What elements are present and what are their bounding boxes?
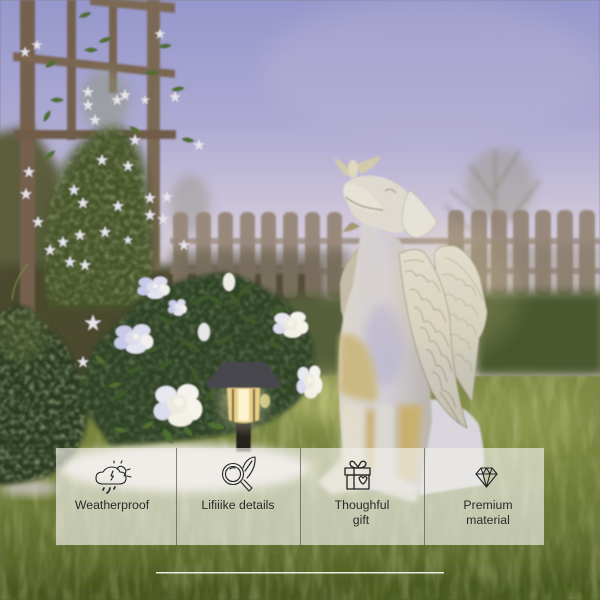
gap shadow behind fence <box>170 250 350 310</box>
divider lines <box>176 448 424 545</box>
climbing vine <box>20 10 205 310</box>
white gravel bed <box>0 444 310 495</box>
warm light overlay <box>380 225 520 355</box>
gardenia flowers <box>114 324 153 354</box>
lawn <box>0 376 600 600</box>
label: Weatherproof <box>75 498 150 512</box>
label: Thoughful <box>335 498 389 512</box>
solar garden lamp <box>207 362 280 452</box>
wooden fence <box>170 210 600 298</box>
feature: premium material: material <box>466 513 510 527</box>
feature: thoughtful gift <box>335 461 389 527</box>
front wing <box>399 249 467 428</box>
grass blades <box>0 376 600 600</box>
icon: gift box <box>345 461 370 489</box>
trellis <box>13 0 176 320</box>
ear <box>402 190 437 238</box>
butterfly <box>334 156 381 176</box>
label: Premium <box>463 498 513 512</box>
icon: cloud with sun and rain <box>96 461 131 493</box>
feature: weatherproof <box>75 461 150 512</box>
icon: magnifier and feather <box>222 457 255 491</box>
gardenia bush <box>77 272 322 446</box>
feature: thoughtful gift: gift <box>353 513 370 527</box>
label: Lifiiike details <box>201 498 275 512</box>
sky background <box>0 0 600 400</box>
golden shaded chest <box>339 334 377 402</box>
bottom rule line <box>156 572 444 574</box>
far left wing <box>340 246 360 325</box>
left shrub <box>0 264 88 485</box>
icon: diamond <box>476 468 497 487</box>
distant trees <box>0 125 534 385</box>
front paws <box>374 405 420 503</box>
feature panel <box>56 448 544 545</box>
haunch <box>415 399 484 495</box>
head <box>343 176 414 233</box>
feature: premium material <box>463 468 513 527</box>
rear wing <box>434 246 487 402</box>
angel dog statue <box>318 156 487 503</box>
hedge behind lawn <box>285 292 600 380</box>
body <box>339 222 432 490</box>
feature: lifelike details <box>201 457 275 512</box>
right bare shrub behind fence <box>445 150 540 260</box>
